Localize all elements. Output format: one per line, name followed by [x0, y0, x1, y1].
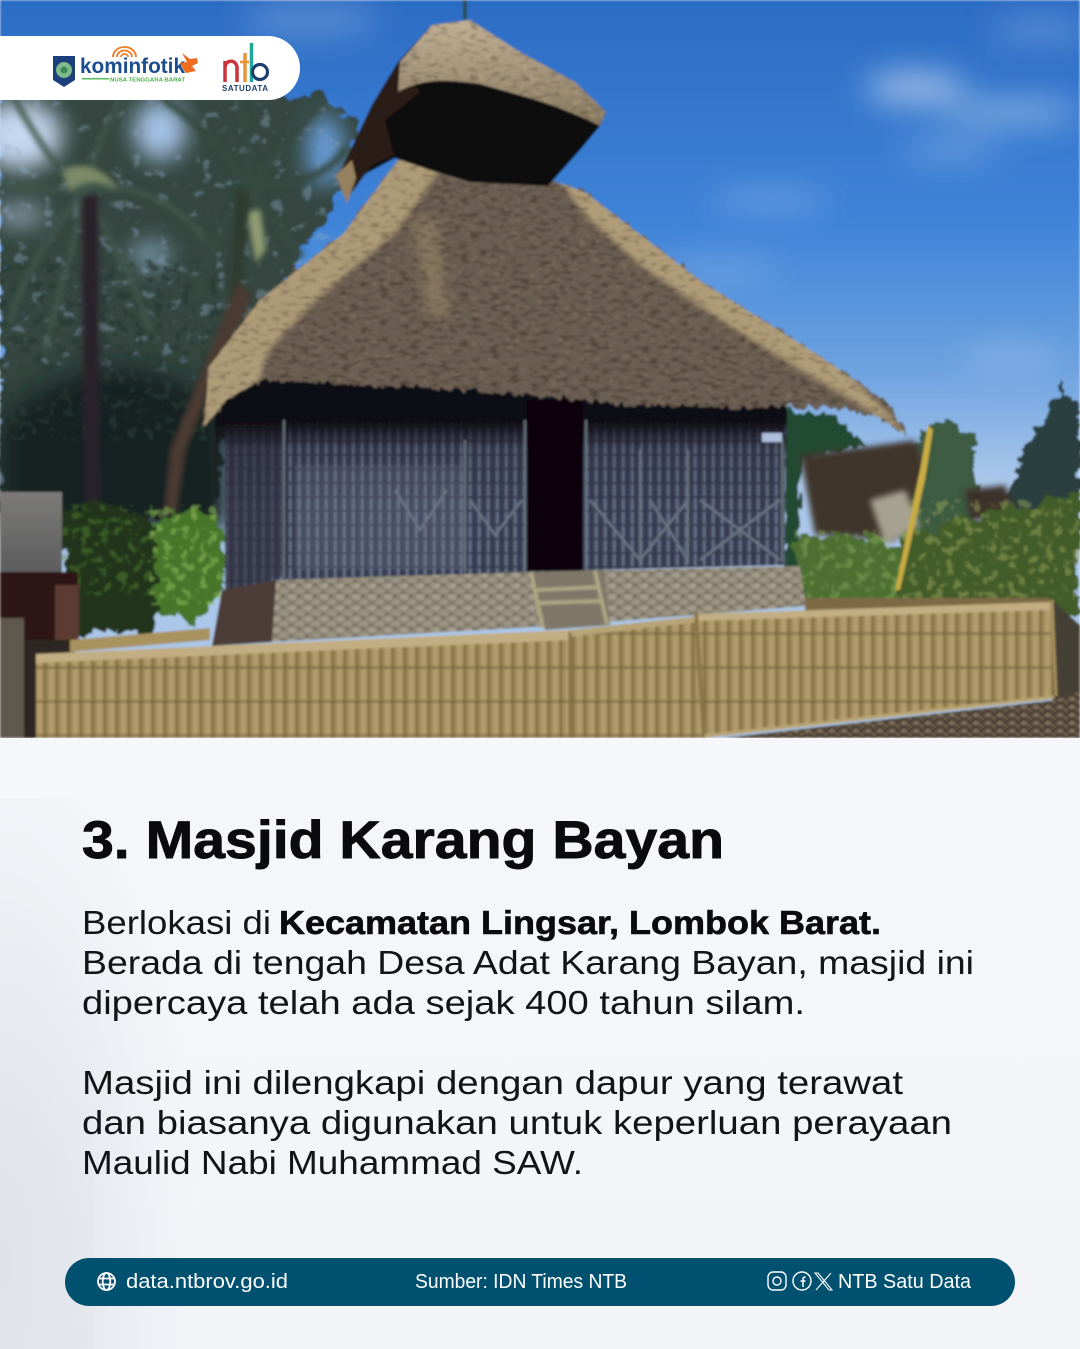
logo: kominfotik: NUSA TENGGARA BARAT	[110, 78, 186, 84]
sky gap under eave	[762, 433, 782, 442]
logo pill	[0, 36, 300, 100]
clouds	[240, 6, 1080, 366]
stone base	[212, 566, 806, 646]
icon: globe	[98, 1273, 115, 1290]
bamboo fence	[36, 600, 1056, 738]
photo: Masjid Karang Bayan thatched mosque	[0, 0, 1080, 738]
mosque walls	[215, 378, 787, 590]
stony ground	[722, 690, 1080, 738]
icon: instagram	[768, 1272, 786, 1290]
icon: provincial crest shield	[53, 56, 75, 87]
paragraph 1: Berlokasi di	[82, 904, 271, 941]
paragraph 1: dipercaya telah ada sejak 400 tahun silam.	[82, 984, 805, 1021]
palm trees left	[0, 95, 358, 530]
paragraph 1: Kecamatan Lingsar, Lombok Barat.	[279, 904, 881, 941]
sky	[0, 0, 1080, 738]
social handle: NTB Satu Data	[838, 1271, 972, 1293]
paragraph 2: Maulid Nabi Muhammad SAW.	[82, 1144, 583, 1181]
roof straw edges	[195, 150, 440, 440]
wooden steps	[531, 571, 607, 628]
main thatched roof	[195, 150, 920, 450]
paragraph 1: Berada di tengah Desa Adat Karang Bayan, masjid ini	[82, 944, 974, 981]
paragraph 2: Masjid ini dilengkapi dengan dapur yang terawat	[82, 1064, 903, 1101]
paragraph 1	[82, 904, 974, 1021]
logo: ntb satu data	[222, 43, 268, 93]
logo: kominfotik	[80, 47, 198, 84]
roof top cap	[336, 0, 610, 204]
foliage left lower	[60, 504, 222, 632]
title: 3. Masjid Karang Bayan	[82, 811, 724, 870]
trees and building right	[785, 385, 1080, 700]
neighbouring hut left	[0, 492, 79, 738]
paragraph 2	[82, 1064, 952, 1181]
mosque door	[527, 400, 583, 571]
icon: facebook	[793, 1272, 811, 1290]
footer bar	[65, 1258, 1015, 1306]
icon: x	[815, 1273, 832, 1290]
source: Sumber: IDN Times NTB	[415, 1271, 627, 1293]
paragraph 2: dan biasanya digunakan untuk keperluan perayaan	[82, 1104, 952, 1141]
logo: ntb satu data: SATUDATA	[222, 84, 268, 93]
logo: kominfotik: kominfotik	[80, 54, 185, 78]
page background texture: faded building at lower left	[0, 937, 126, 1349]
website: data.ntbrov.go.id	[126, 1271, 288, 1293]
